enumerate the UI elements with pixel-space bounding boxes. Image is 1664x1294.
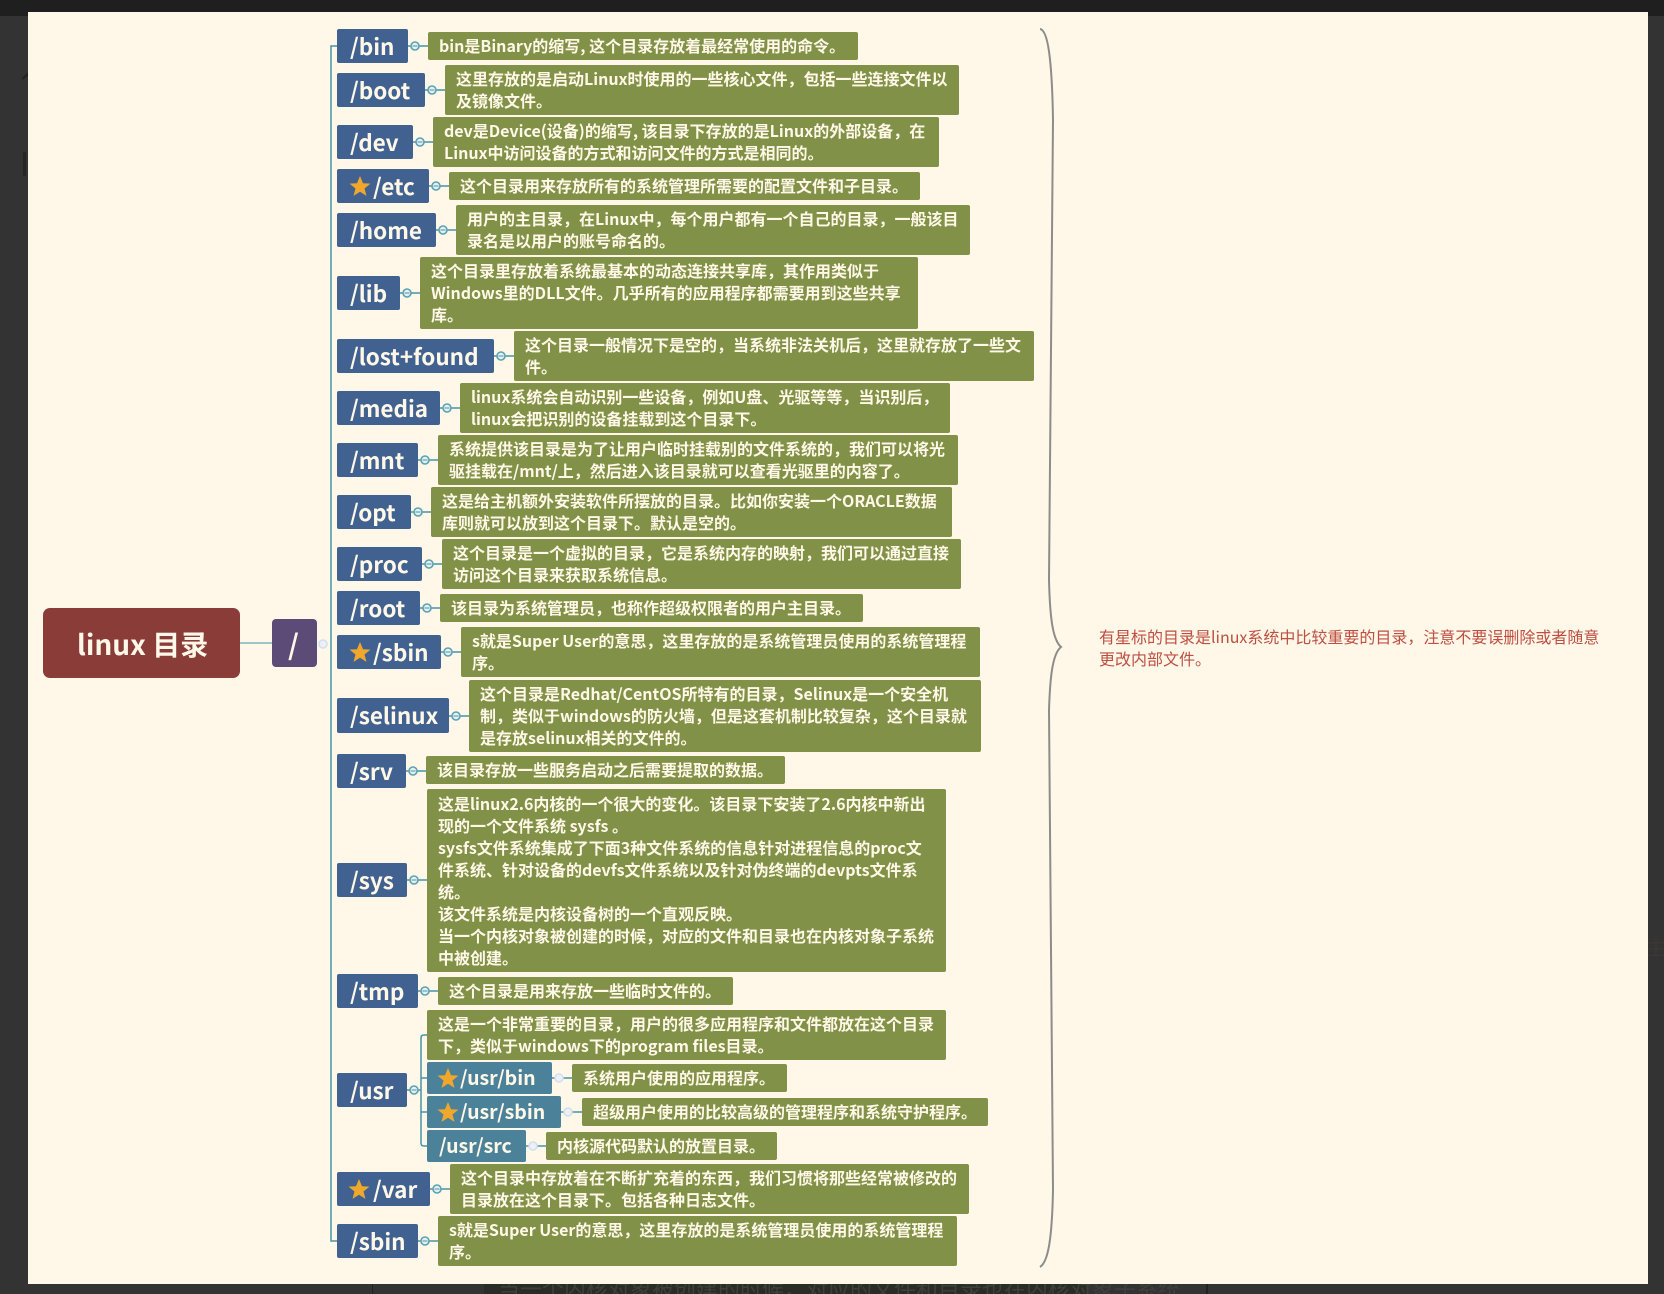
- row: /lost+found: /lost+found: [350, 340, 479, 372]
- sub-row: /usr/src: /usr/src: [439, 1130, 512, 1159]
- summary brace: [1040, 29, 1061, 1267]
- row: /etc (starred): 这个目录用来存放所有的系统管理所需要的配置文件和子目录。: [460, 173, 908, 197]
- row: /bin: /bin: [350, 30, 394, 62]
- row: /var (starred): 目录放在这个目录下。包括各种日志文件。: [461, 1187, 765, 1211]
- row: /sbin: /sbin: [350, 1225, 406, 1257]
- row: /boot: 及镜像文件。: [456, 88, 552, 112]
- row: /proc: /proc: [350, 548, 409, 580]
- row: /dev: Linux中访问设备的方式和访问文件的方式是相同的。: [444, 140, 824, 164]
- sub-row: /usr/src: [427, 1130, 777, 1162]
- callout: note on starred directories: 有星标的目录是linux系统中比较重要的目录，注意不要误删除或者随意: [1099, 624, 1599, 648]
- row: /dev: dev是Device(设备)的缩写, 该目录下存放的是Linux的外部设备，在: [444, 118, 925, 142]
- row: /etc (starred): [337, 169, 920, 203]
- callout: note on starred directories: 更改内部文件。: [1099, 646, 1211, 670]
- row: /proc: [337, 539, 961, 589]
- row: /sys: 这是linux2.6内核的一个很大的变化。该目录下安装了2.6内核中新出: [438, 791, 926, 815]
- row: /bin: [337, 29, 858, 63]
- row: /opt: [337, 487, 952, 537]
- row: /sys: [337, 789, 946, 972]
- sub-row: /usr/src: 内核源代码默认的放置目录。: [557, 1133, 765, 1157]
- branch node: /: [272, 619, 327, 667]
- row: /opt: /opt: [350, 496, 396, 528]
- row: /dev: [337, 117, 939, 167]
- row: /lost+found: 件。: [525, 354, 557, 378]
- row: /sys: 当一个内核对象被创建的时候，对应的文件和目录也在内核对象子系统: [438, 923, 934, 947]
- row: /mnt: [337, 435, 958, 485]
- node: /usr: [337, 1073, 407, 1107]
- row: /var (starred): [337, 1164, 969, 1214]
- row: /media: [337, 383, 950, 433]
- row: /selinux: 这个目录是Redhat/CentOS所特有的目录，Selinux是一个安全机: [480, 681, 948, 705]
- sub-row: /usr/sbin: /usr/sbin: [460, 1096, 545, 1125]
- sub-row: /usr/sbin: [427, 1096, 988, 1128]
- row: /boot: 这里存放的是启动Linux时使用的一些核心文件，包括一些连接文件以: [456, 66, 948, 90]
- row: /srv: 该目录存放一些服务启动之后需要提取的数据。: [437, 757, 773, 781]
- row: /proc: 访问这个目录来获取系统信息。: [453, 562, 677, 586]
- row: /usr with sub-directories: [337, 1010, 988, 1162]
- row: /lib: Windows里的DLL文件。几乎所有的应用程序都需要用到这些共享: [431, 280, 901, 304]
- row: /lost+found: 这个目录一般情况下是空的，当系统非法关机后，这里就存放了一些文: [525, 332, 1021, 356]
- sub-row: /usr/bin: 系统用户使用的应用程序。: [583, 1065, 775, 1089]
- row: /lib: /lib: [350, 277, 387, 309]
- row: /sys: /sys: [350, 864, 394, 896]
- row: /tmp: /tmp: [350, 975, 404, 1007]
- row: /sbin (starred): 序。: [472, 650, 504, 674]
- sub-row: /usr/bin: /usr/bin: [460, 1062, 536, 1091]
- row: /home: [337, 205, 970, 255]
- description: /usr: 下，类似于windows下的program files目录。: [438, 1033, 774, 1057]
- row: /proc: 这个目录是一个虚拟的目录，它是系统内存的映射，我们可以通过直接: [453, 540, 949, 564]
- row: /mnt: 驱挂载在/mnt/上，然后进入该目录就可以查看光驱里的内容了。: [449, 458, 910, 482]
- row: /media: linux会把识别的设备挂载到这个目录下。: [471, 406, 766, 430]
- row: /sys: sysfs文件系统集成了下面3种文件系统的信息针对进程信息的proc文: [438, 835, 922, 859]
- row: /home: 录名是以用户的账号命名的。: [467, 228, 675, 252]
- description: /usr: 这是一个非常重要的目录，用户的很多应用程序和文件都放在这个目录: [438, 1011, 934, 1035]
- row: /dev: /dev: [350, 126, 399, 158]
- row: /mnt: 系统提供该目录是为了让用户临时挂载别的文件系统的，我们可以将光: [449, 436, 945, 460]
- row: /selinux: 制，类似于windows的防火墙，但是这套机制比较复杂，这个目录就: [480, 703, 967, 727]
- sub-row: /usr/sbin: 超级用户使用的比较高级的管理程序和系统守护程序。: [593, 1099, 977, 1123]
- row: /sbin (starred): /sbin: [373, 636, 429, 668]
- row: /lib: [337, 257, 918, 329]
- row: /sys: 统。: [438, 879, 470, 903]
- row: /sys: 该文件系统是内核设备树的一个直观反映。: [438, 901, 742, 925]
- root node: linux 目录: [43, 608, 272, 678]
- row: /boot: /boot: [350, 74, 411, 106]
- row: /var (starred): /var: [373, 1173, 417, 1205]
- row: /boot: [337, 65, 959, 115]
- row: /root: 该目录为系统管理员，也称作超级权限者的用户主目录。: [451, 595, 851, 619]
- callout: note on starred directories: [1099, 624, 1599, 670]
- row: /bin: bin是Binary的缩写, 这个目录存放着最经常使用的命令。: [439, 33, 845, 57]
- row: /sbin: s就是Super User的意思，这里存放的是系统管理员使用的系统管理程: [449, 1217, 943, 1241]
- root node: linux 目录: linux 目录: [77, 624, 208, 664]
- row: /tmp: 这个目录是用来存放一些临时文件的。: [449, 978, 721, 1002]
- row: /home: /home: [350, 214, 422, 246]
- row: /sbin (starred): s就是Super User的意思，这里存放的是系统管理员使用的系统管理程: [472, 628, 966, 652]
- row: /mnt: /mnt: [350, 444, 405, 476]
- branch node: /: /: [288, 624, 299, 664]
- row: /media: /media: [350, 392, 428, 424]
- row: /lost+found: [337, 331, 1034, 381]
- row: /media: linux系统会自动识别一些设备，例如U盘、光驱等等，当识别后，: [471, 384, 938, 408]
- trunk connector: [331, 46, 337, 1241]
- row: /root: /root: [350, 592, 406, 624]
- row: /sys: 现的一个文件系统 sysfs 。: [438, 813, 628, 837]
- description: /usr: [427, 1010, 946, 1060]
- row: /sbin (starred): [337, 627, 980, 677]
- row: /var (starred): 这个目录中存放着在不断扩充着的东西，我们习惯将那些经常被修改的: [461, 1165, 957, 1189]
- row: /selinux: 是存放selinux相关的文件的。: [480, 725, 697, 749]
- row: /lib: 库。: [431, 302, 463, 326]
- row: /root: [337, 591, 863, 625]
- row: /sys: 件系统、针对设备的devfs文件系统以及针对伪终端的devpts文件系: [438, 857, 918, 881]
- row: /sys: 中被创建。: [438, 945, 518, 969]
- row: /etc (starred): /etc: [373, 170, 415, 202]
- row: /opt: 库则就可以放到这个目录下。默认是空的。: [442, 510, 746, 534]
- row: /sbin: 序。: [449, 1239, 481, 1263]
- row: /selinux: [337, 680, 981, 752]
- row: /srv: /srv: [350, 755, 393, 787]
- sub-row: /usr/bin: [427, 1062, 787, 1094]
- node: /usr: /usr: [350, 1074, 394, 1106]
- row: /sbin: [337, 1216, 957, 1266]
- row: /lib: 这个目录里存放着系统最基本的动态连接共享库，其作用类似于: [431, 258, 879, 282]
- row: /opt: 这是给主机额外安装软件所摆放的目录。比如你安装一个ORACLE数据: [442, 488, 937, 512]
- row: /home: 用户的主目录，在Linux中，每个用户都有一个自己的目录，一般该目: [467, 206, 959, 230]
- row: /srv: [337, 754, 785, 788]
- row: /tmp: [337, 974, 733, 1008]
- row: /selinux: /selinux: [350, 699, 439, 731]
